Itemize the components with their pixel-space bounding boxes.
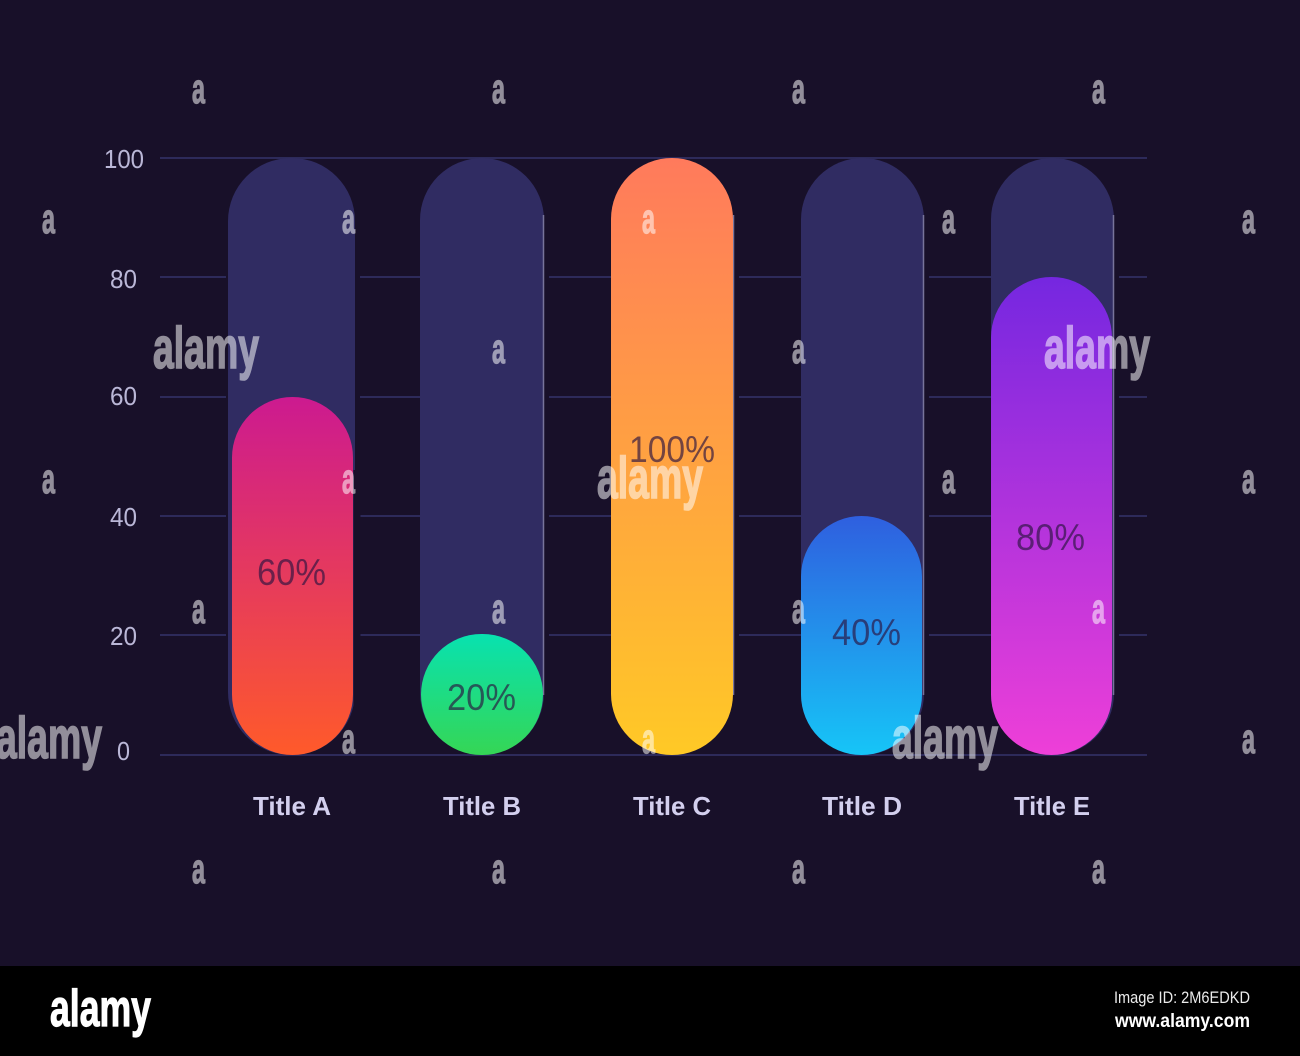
category titles: Title C bbox=[633, 791, 711, 821]
watermark small letters: a bbox=[1092, 65, 1105, 112]
watermark wordmarks: alamy bbox=[0, 706, 102, 771]
y axis labels: 20 bbox=[110, 621, 137, 651]
watermark small letters: a bbox=[492, 585, 505, 632]
watermark small letters: a bbox=[1242, 195, 1255, 242]
watermark small letters: a bbox=[1092, 585, 1105, 632]
watermark small letters: a bbox=[342, 455, 355, 502]
watermark small letters: a bbox=[792, 845, 805, 892]
footer bar bbox=[0, 966, 1300, 1056]
watermark small letters: a bbox=[42, 455, 55, 502]
watermark small letters: a bbox=[42, 195, 55, 242]
watermark small letters: a bbox=[192, 585, 205, 632]
bar: Title B 20% bbox=[420, 158, 549, 755]
category titles bbox=[253, 791, 1090, 821]
watermark wordmarks bbox=[0, 316, 1150, 771]
watermark small letters: a bbox=[342, 195, 355, 242]
category titles: Title B bbox=[443, 791, 521, 821]
watermark small letters: a bbox=[1242, 715, 1255, 762]
watermark small letters: a bbox=[342, 715, 355, 762]
watermark wordmarks: alamy bbox=[153, 316, 259, 381]
bar: Title D 40%: 40% bbox=[832, 612, 901, 653]
y axis labels: 40 bbox=[110, 502, 137, 532]
watermark small letters: a bbox=[492, 325, 505, 372]
category titles: Title A bbox=[253, 791, 331, 821]
bar: Title B 20%: 20% bbox=[447, 677, 516, 718]
watermark small letters: a bbox=[792, 585, 805, 632]
category titles: Title E bbox=[1014, 791, 1090, 821]
y axis labels bbox=[104, 144, 144, 766]
watermark small letters: a bbox=[492, 65, 505, 112]
watermark wordmarks: alamy bbox=[892, 706, 998, 771]
watermark small letters: a bbox=[942, 195, 955, 242]
y axis labels: 100 bbox=[104, 144, 144, 174]
footer url: www.alamy.com bbox=[1114, 1011, 1250, 1032]
watermark small letters: a bbox=[492, 845, 505, 892]
watermark small letters: a bbox=[192, 65, 205, 112]
bar: Title A 60% bbox=[226, 158, 360, 755]
watermark small letters: a bbox=[1092, 845, 1105, 892]
watermark small letters bbox=[42, 65, 1255, 892]
watermark small letters: a bbox=[792, 65, 805, 112]
watermark small letters: a bbox=[192, 845, 205, 892]
watermark small letters: a bbox=[642, 195, 655, 242]
bar: Title E 80%: 80% bbox=[1016, 517, 1085, 558]
watermark wordmarks: alamy bbox=[597, 446, 703, 511]
gridlines bbox=[160, 158, 1147, 755]
watermark small letters: a bbox=[942, 455, 955, 502]
image id: Image ID: 2M6EDKD bbox=[1114, 988, 1250, 1007]
watermark small letters: a bbox=[1242, 455, 1255, 502]
y axis labels: 80 bbox=[110, 264, 137, 294]
bar: Title D 40% bbox=[801, 158, 929, 755]
bar: Title A 60%: 60% bbox=[257, 552, 326, 593]
category titles: Title D bbox=[822, 791, 902, 821]
bar: Title C 100%: 100% bbox=[629, 429, 715, 470]
y axis labels: 0 bbox=[117, 736, 130, 766]
footer logo: alamy bbox=[50, 980, 151, 1038]
bar: Title E 80% bbox=[991, 158, 1119, 755]
watermark small letters: a bbox=[642, 715, 655, 762]
watermark small letters: a bbox=[792, 325, 805, 372]
bar: Title C 100% bbox=[611, 158, 739, 755]
y axis labels: 60 bbox=[110, 381, 137, 411]
watermark wordmarks: alamy bbox=[1044, 316, 1150, 381]
